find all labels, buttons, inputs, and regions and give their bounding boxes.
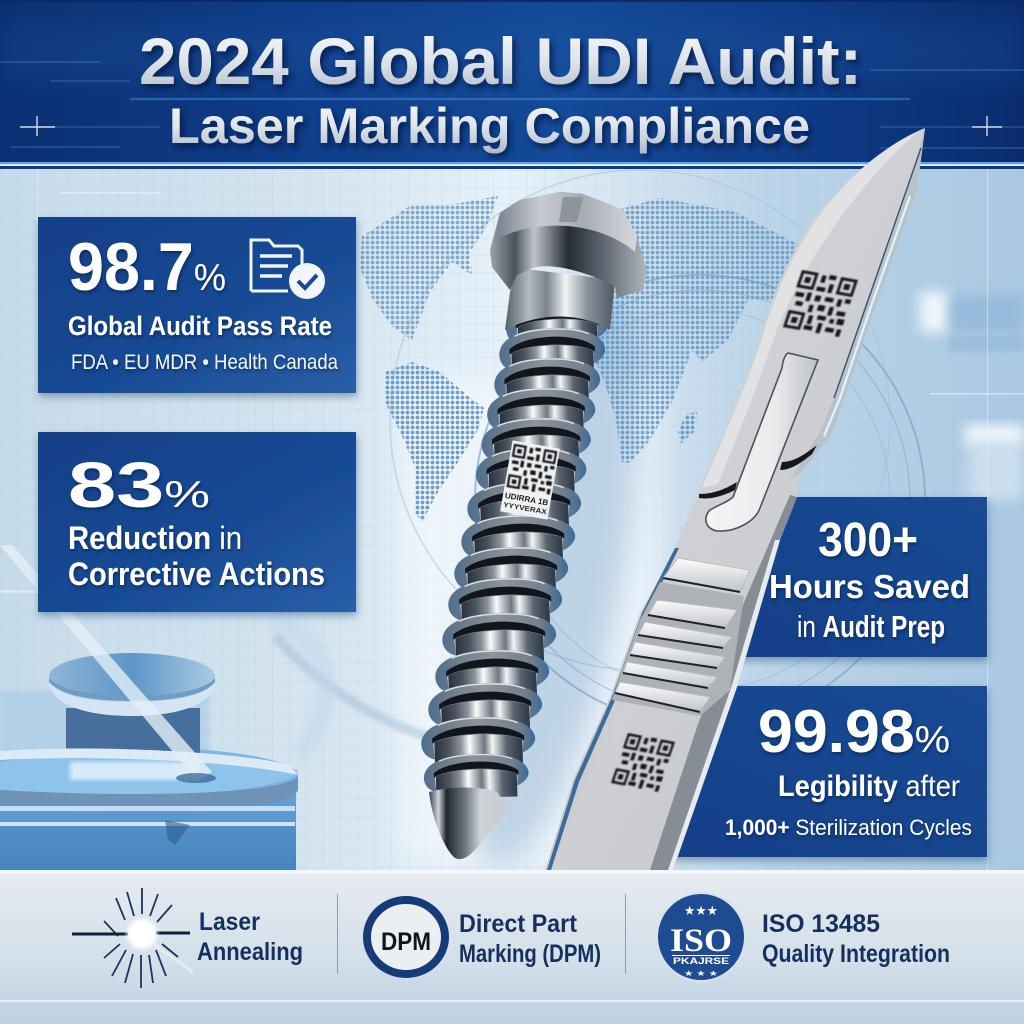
text: ISO 13485: ISO 13485 <box>762 910 880 938</box>
icon: ISO badge: ★ ★ ★ <box>684 969 718 978</box>
text: laser annealing: Annealing <box>197 938 303 966</box>
icon: laser annealing <box>72 888 193 988</box>
value 300+: 300+ <box>818 514 918 567</box>
icon: DPM badge <box>367 900 445 974</box>
text: direct part marking: Marking (DPM) <box>459 940 601 968</box>
text: ISO 13485: Quality Integration <box>762 940 950 968</box>
qr mark lower <box>611 733 675 792</box>
screw tip <box>429 788 508 859</box>
lab glassware photo <box>0 545 326 870</box>
screw threads <box>420 300 609 800</box>
world map backdrop <box>275 170 925 742</box>
sparkle left <box>20 116 55 136</box>
icon: DPM badge: DPM <box>381 928 431 956</box>
icon: document with check <box>251 240 325 299</box>
text: laser annealing <box>197 908 303 966</box>
laser-marked label on screw <box>500 440 560 520</box>
stat panel: 300+ <box>730 497 987 657</box>
grip ridges <box>612 558 750 716</box>
qr mark upper <box>783 270 858 337</box>
blade slits <box>699 482 737 498</box>
header band <box>0 0 1024 169</box>
label line 1: Legibility after <box>778 770 960 803</box>
label line 1: Reduction in <box>68 520 242 556</box>
bottom strip <box>0 870 1024 1024</box>
text: laser annealing: Laser <box>199 908 260 936</box>
value 99.98%: 99.98% <box>758 698 950 765</box>
title line 1: 2024 Global UDI Audit: <box>139 24 862 98</box>
value 98.7%: 98.7% <box>68 229 226 305</box>
value 83%: 83 % <box>68 449 210 521</box>
screw collar <box>505 268 615 330</box>
text: direct part marking: Direct Part <box>459 910 578 938</box>
icon: ISO badge <box>657 893 745 981</box>
screw head <box>490 192 647 298</box>
icon: ISO badge: ISO <box>670 923 732 959</box>
clip tab <box>706 353 818 531</box>
icon: ISO badge: PKAJRSE <box>673 956 729 966</box>
stat panel: 98.7% <box>38 217 356 393</box>
label line 1: Hours Saved <box>769 568 970 605</box>
stat panel: 83% <box>38 432 356 612</box>
regulators: FDA • EU MDR • Health Canada <box>71 351 338 374</box>
sparkle right <box>972 116 1002 136</box>
label line 2: 1,000+ Sterilization Cycles <box>725 815 972 840</box>
icon: ISO badge: ★★★ <box>684 903 718 918</box>
laser-marked label on screw: YYYVERAX <box>503 502 548 516</box>
stat panel: 99.98% <box>660 686 987 857</box>
label line 2: in Audit Prep <box>797 609 945 644</box>
text: direct part marking <box>459 910 601 968</box>
laser-marked label on screw: UDIRRA 1B <box>504 491 549 507</box>
head slot <box>559 197 583 222</box>
left edge highlight <box>702 132 918 488</box>
label: Global Audit Pass Rate <box>68 311 332 341</box>
handle side strip <box>650 495 797 870</box>
title line 2: Laser Marking Compliance <box>169 98 810 154</box>
scalpel <box>545 128 925 870</box>
right bevel <box>790 128 925 480</box>
label line 2: Corrective Actions <box>68 556 325 592</box>
text: ISO 13485 <box>762 910 950 968</box>
bone screw <box>420 192 673 878</box>
